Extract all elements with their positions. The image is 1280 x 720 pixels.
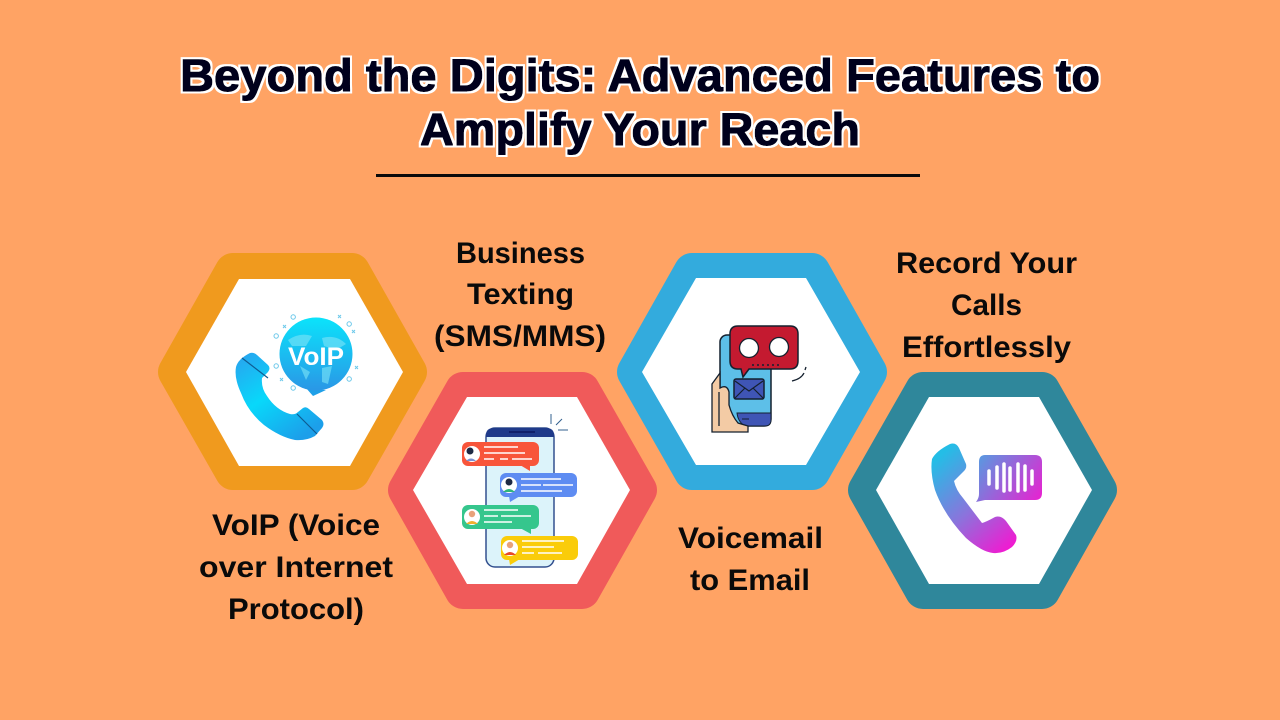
icon: phone with voicemail bubble and envelope bbox=[712, 326, 806, 432]
icon: VoIP phone and globe bubble bbox=[236, 315, 358, 440]
label: Record Your Calls Effortlessly: Calls bbox=[951, 289, 1022, 322]
label: VoIP: Protocol) bbox=[228, 593, 364, 626]
label: Voicemail to Email: to Email bbox=[690, 564, 810, 597]
panel: Business Texting hexagon bbox=[406, 390, 639, 591]
label: Business Texting bbox=[434, 237, 606, 353]
label: Business Texting: Texting bbox=[467, 278, 574, 311]
title: Beyond the Digits: Advanced Features to bbox=[180, 50, 1100, 101]
icon: gradient phone with audio bubble bbox=[931, 444, 1042, 553]
label: Record Your Calls Effortlessly: Record Your bbox=[896, 247, 1077, 280]
title underline bbox=[376, 174, 920, 177]
icon: smartphone with chat bubbles bbox=[462, 414, 578, 567]
chat bubble: green bbox=[462, 505, 539, 534]
label: Voicemail to Email: Voicemail bbox=[678, 522, 823, 555]
title bbox=[180, 50, 1100, 155]
chat bubble: red bbox=[462, 442, 539, 471]
panel: VoIP hexagon bbox=[176, 271, 409, 472]
label: VoIP: over Internet bbox=[199, 551, 393, 584]
icon: VoIP phone and globe bubble: VoIP bbox=[288, 343, 344, 371]
panel: Record Calls hexagon bbox=[866, 390, 1099, 591]
label: Business Texting: Business bbox=[456, 237, 585, 270]
label: VoIP bbox=[199, 509, 393, 626]
label: Business Texting: (SMS/MMS) bbox=[434, 320, 606, 353]
chat bubble: yellow bbox=[501, 536, 578, 565]
panel: Voicemail hexagon bbox=[635, 271, 869, 472]
label: Voicemail to Email bbox=[678, 522, 823, 597]
label: Record Your Calls Effortlessly: Effortlessly bbox=[902, 331, 1071, 364]
label: VoIP: VoIP (Voice bbox=[212, 509, 380, 542]
label: Record Your Calls Effortlessly bbox=[896, 247, 1077, 364]
title: Amplify Your Reach bbox=[420, 104, 860, 155]
chat bubble: blue bbox=[500, 473, 577, 502]
